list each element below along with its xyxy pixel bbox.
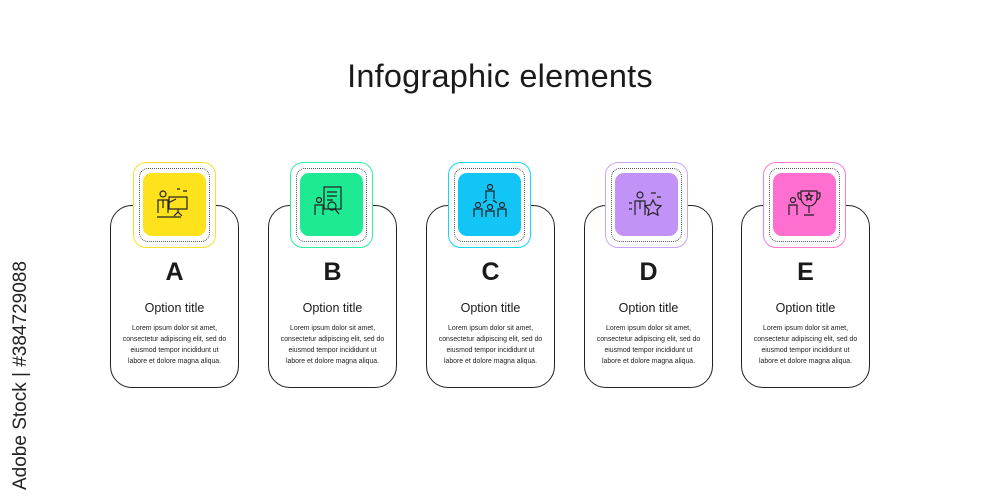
text: consectetur adipiscing elit, sed do: [281, 336, 384, 343]
icon: presentation: [133, 162, 216, 248]
icon: person with star: [605, 162, 688, 248]
text: labore et dolore magna aliqua.: [759, 358, 852, 365]
text: labore et dolore magna aliqua.: [286, 358, 379, 365]
text: Option title: [619, 301, 678, 315]
watermark: Adobe Stock | #384729088: [10, 261, 31, 490]
text: Lorem ipsum dolor sit amet,: [132, 325, 217, 332]
text: consectetur adipiscing elit, sed do: [597, 336, 700, 343]
icon: document search: [290, 162, 373, 248]
text: Lorem ipsum dolor sit amet,: [606, 325, 691, 332]
text: Lorem ipsum dolor sit amet,: [290, 325, 375, 332]
panel: C: [426, 162, 555, 388]
panel: A: [110, 162, 239, 388]
text: A: [165, 258, 184, 286]
text: E: [797, 258, 814, 286]
text: Option title: [145, 301, 204, 315]
text: eiusmod tempor incididunt ut: [288, 347, 377, 354]
text: B: [323, 258, 342, 286]
text: Lorem ipsum dolor sit amet,: [448, 325, 533, 332]
text: labore et dolore magna aliqua.: [602, 358, 695, 365]
text: Option title: [461, 301, 520, 315]
text: eiusmod tempor incididunt ut: [446, 347, 535, 354]
icon: team: [448, 162, 531, 248]
panel: E: [741, 162, 870, 388]
text: Lorem ipsum dolor sit amet,: [763, 325, 848, 332]
text: consectetur adipiscing elit, sed do: [439, 336, 542, 343]
text: Option title: [303, 301, 362, 315]
text: labore et dolore magna aliqua.: [444, 358, 537, 365]
title: Infographic elements: [347, 58, 653, 94]
icon: trophy: [763, 162, 846, 248]
text: consectetur adipiscing elit, sed do: [754, 336, 857, 343]
text: eiusmod tempor incididunt ut: [130, 347, 219, 354]
panel: D: [584, 162, 713, 388]
text: eiusmod tempor incididunt ut: [604, 347, 693, 354]
panel: B: [268, 162, 397, 388]
text: D: [639, 258, 658, 286]
text: labore et dolore magna aliqua.: [128, 358, 221, 365]
text: C: [481, 258, 500, 286]
text: consectetur adipiscing elit, sed do: [123, 336, 226, 343]
text: Option title: [776, 301, 835, 315]
text: eiusmod tempor incididunt ut: [761, 347, 850, 354]
